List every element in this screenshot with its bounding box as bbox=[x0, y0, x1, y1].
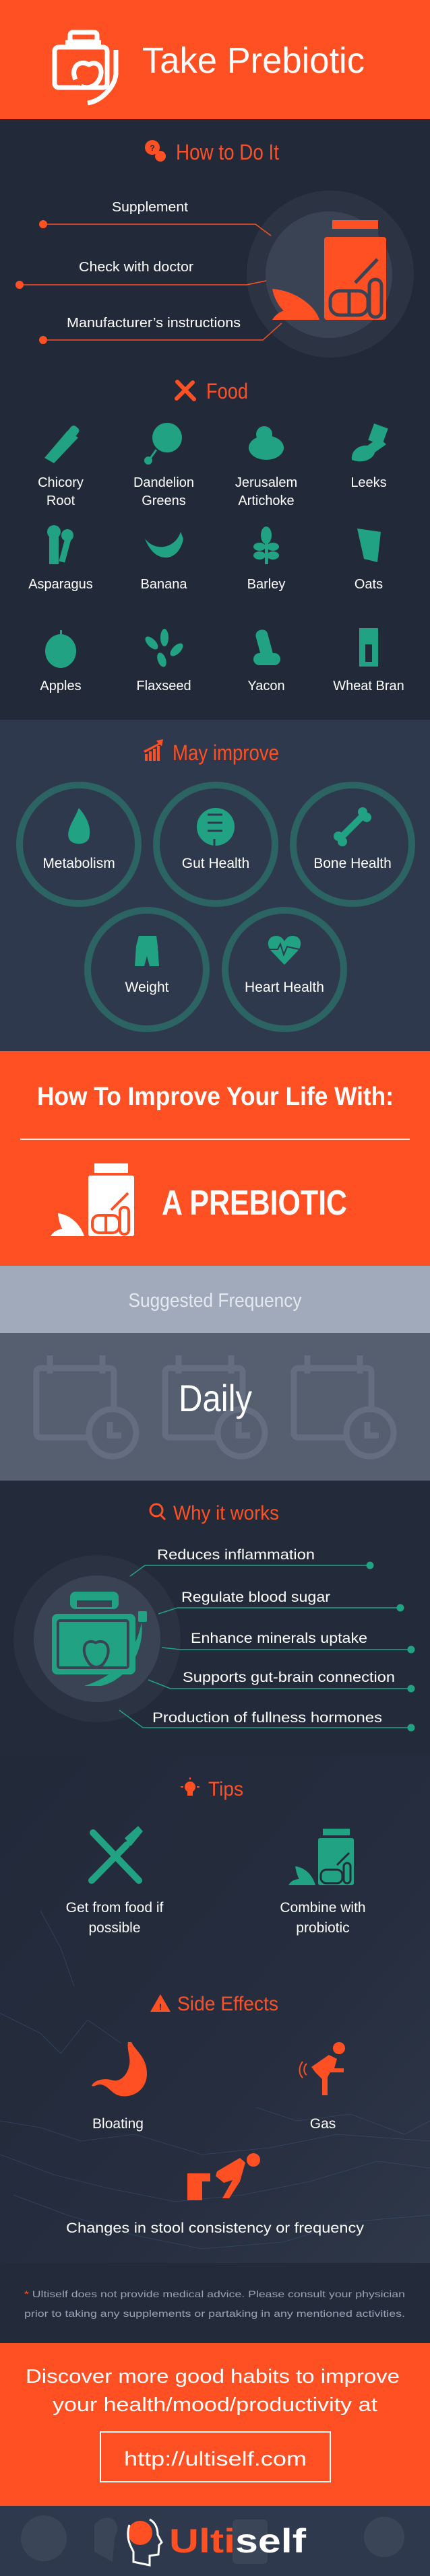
food labels: Yacon bbox=[247, 679, 285, 693]
footer bbox=[0, 2506, 430, 2576]
food labels: Greens bbox=[142, 494, 186, 508]
reason: Reduces inflammation bbox=[130, 1547, 373, 1576]
benefit: Metabolism: Metabolism bbox=[42, 856, 115, 871]
disclaimer: * Ultiself does not provide medical advice. Please consult your physician bbox=[24, 2289, 405, 2299]
food labels bbox=[28, 475, 404, 693]
reason: Production of fullness hormones: Production of fullness hormones bbox=[152, 1710, 382, 1726]
band: daily: Daily bbox=[179, 1377, 252, 1419]
food labels: Wheat Bran bbox=[333, 679, 404, 693]
band: daily bbox=[0, 1333, 430, 1481]
heading: Side Effects: Side Effects bbox=[177, 1993, 278, 2015]
side effect: Gas bbox=[299, 2042, 345, 2132]
reason: Supports gut-brain connection bbox=[148, 1670, 415, 1693]
call to action: your health/mood/productivity at bbox=[53, 2394, 377, 2416]
food: wheat bran bbox=[359, 628, 378, 667]
food: banana bbox=[145, 532, 183, 557]
food: yacon bbox=[253, 628, 280, 665]
heading: How To Improve Your Life With: How To Improve Your Life With: bbox=[37, 1083, 394, 1111]
text: A PREBIOTIC: A PREBIOTIC bbox=[162, 1184, 347, 1223]
heading: Side Effects: ! bbox=[159, 2002, 162, 2012]
panel: how to improve your life bbox=[0, 1051, 430, 1266]
benefit: Bone Health: Bone Health bbox=[313, 856, 392, 871]
food: asparagus bbox=[47, 525, 73, 564]
logo: Ultiself: Ulti self bbox=[169, 2522, 306, 2560]
heading: May improve: May improve bbox=[173, 741, 279, 765]
band: suggested frequency bbox=[0, 1266, 430, 1333]
benefit: Weight bbox=[88, 910, 206, 1029]
reason: Enhance minerals uptake bbox=[162, 1631, 415, 1654]
benefit: Bone Health bbox=[293, 785, 412, 904]
reason: Reduces inflammation: Reduces inflammation bbox=[157, 1547, 315, 1563]
tip: Get from food if possible: possible bbox=[88, 1920, 141, 1936]
title: Take Prebiotic bbox=[142, 40, 365, 81]
reason: Regulate blood sugar: Regulate blood sugar bbox=[181, 1590, 330, 1605]
food labels: Dandelion bbox=[133, 475, 194, 490]
food labels: Banana bbox=[141, 577, 187, 592]
tip: Combine with probiotic: Combine with bbox=[280, 1900, 366, 1916]
disclaimer bbox=[0, 2263, 430, 2343]
graphic: lunch box circle bbox=[13, 1555, 181, 1722]
benefit: Gut Health: Gut Health bbox=[182, 856, 249, 871]
heading: Tips: Tips bbox=[208, 1778, 243, 1800]
disclaimer: prior to taking any supplements or partaking in any mentioned activities. bbox=[24, 2308, 405, 2319]
band: suggested frequency: Suggested Frequency bbox=[128, 1290, 302, 1312]
heading: Why it works: Why it works bbox=[173, 1502, 279, 1524]
food grid bbox=[44, 423, 388, 668]
graphic: jar circle bbox=[247, 191, 414, 358]
food: dandelion bbox=[144, 423, 182, 465]
food labels: Asparagus bbox=[28, 577, 93, 592]
icons: calendars bbox=[36, 1355, 394, 1456]
side effect: Changes in stool bbox=[66, 2153, 365, 2236]
header band bbox=[0, 0, 430, 119]
button: url: http://ultiself.com bbox=[124, 2448, 307, 2470]
icon: lunch box bbox=[55, 32, 116, 103]
tip: Get from food if possible: Get from food if bbox=[66, 1900, 164, 1916]
food: leeks bbox=[352, 423, 388, 461]
reason: Supports gut-brain connection: Supports gut-brain connection bbox=[183, 1670, 395, 1685]
food labels: Apples bbox=[40, 679, 82, 693]
food: flaxseed bbox=[143, 629, 185, 668]
heading: Food: Food bbox=[206, 379, 248, 403]
tip: Combine with probiotic: probiotic bbox=[296, 1920, 350, 1936]
item: Manufacturer's instructions bbox=[39, 316, 282, 344]
item: Supplement bbox=[39, 200, 271, 236]
call to action: Discover more good habits to improve bbox=[26, 2366, 400, 2387]
reason: Regulate blood sugar bbox=[158, 1590, 404, 1614]
benefit: Gut Health bbox=[156, 785, 275, 904]
panel: how to do it bbox=[0, 119, 430, 720]
food: oats bbox=[357, 529, 381, 562]
benefit: Metabolism bbox=[20, 785, 138, 904]
icon: prebiotic jar bbox=[51, 1163, 134, 1236]
item: Check with doctor bbox=[16, 260, 266, 289]
benefit: Heart Health bbox=[225, 910, 344, 1029]
food labels: Flaxseed bbox=[136, 679, 191, 693]
food: jerusalem artichoke bbox=[249, 426, 284, 460]
side effect: Bloating bbox=[92, 2042, 147, 2132]
food labels: Oats bbox=[355, 577, 383, 592]
side effect: Bloating: Bloating bbox=[92, 2116, 144, 2132]
reason: Enhance minerals uptake: Enhance minerals uptake bbox=[191, 1631, 367, 1646]
food labels: Chicory bbox=[38, 475, 84, 490]
panel: tips and side effects bbox=[0, 1755, 430, 2263]
heading: Tips bbox=[181, 1777, 243, 1800]
food labels: Artichoke bbox=[238, 494, 295, 508]
item: Manufacturer's instructions: Manufacturer’s instructions bbox=[67, 316, 241, 331]
panel: may improve bbox=[0, 720, 430, 1051]
tip: Get from food if possible bbox=[66, 1826, 164, 1936]
panel: why it works bbox=[0, 1481, 430, 1755]
side effect: Changes in stool: Changes in stool consistency or frequency bbox=[66, 2221, 365, 2236]
item: Supplement: Supplement bbox=[112, 200, 188, 215]
food labels: Jerusalem bbox=[235, 475, 297, 490]
reason: Production of fullness hormones bbox=[119, 1710, 415, 1732]
heading: How to Do It: ? bbox=[150, 143, 155, 153]
benefit: Heart Health: Heart Health bbox=[245, 980, 324, 995]
food: barley bbox=[253, 527, 279, 564]
logo: Ultiself bbox=[128, 2519, 306, 2565]
heading: How to Do It: How to Do It bbox=[176, 140, 279, 164]
button: url bbox=[100, 2432, 330, 2482]
call to action bbox=[0, 2343, 430, 2506]
food labels: Leeks bbox=[350, 475, 387, 490]
food labels: Root bbox=[47, 494, 75, 508]
tip: Combine with probiotic bbox=[280, 1829, 366, 1936]
benefit: Weight: Weight bbox=[125, 980, 169, 995]
side effect: Gas: Gas bbox=[310, 2116, 336, 2132]
item: Check with doctor: Check with doctor bbox=[79, 260, 193, 275]
heading: May improve bbox=[144, 739, 279, 765]
food labels: Barley bbox=[247, 577, 285, 592]
heading: How to Do It bbox=[145, 140, 279, 164]
food: chicory root bbox=[44, 424, 80, 463]
heading: Food bbox=[177, 379, 248, 403]
food: apples bbox=[45, 630, 76, 668]
